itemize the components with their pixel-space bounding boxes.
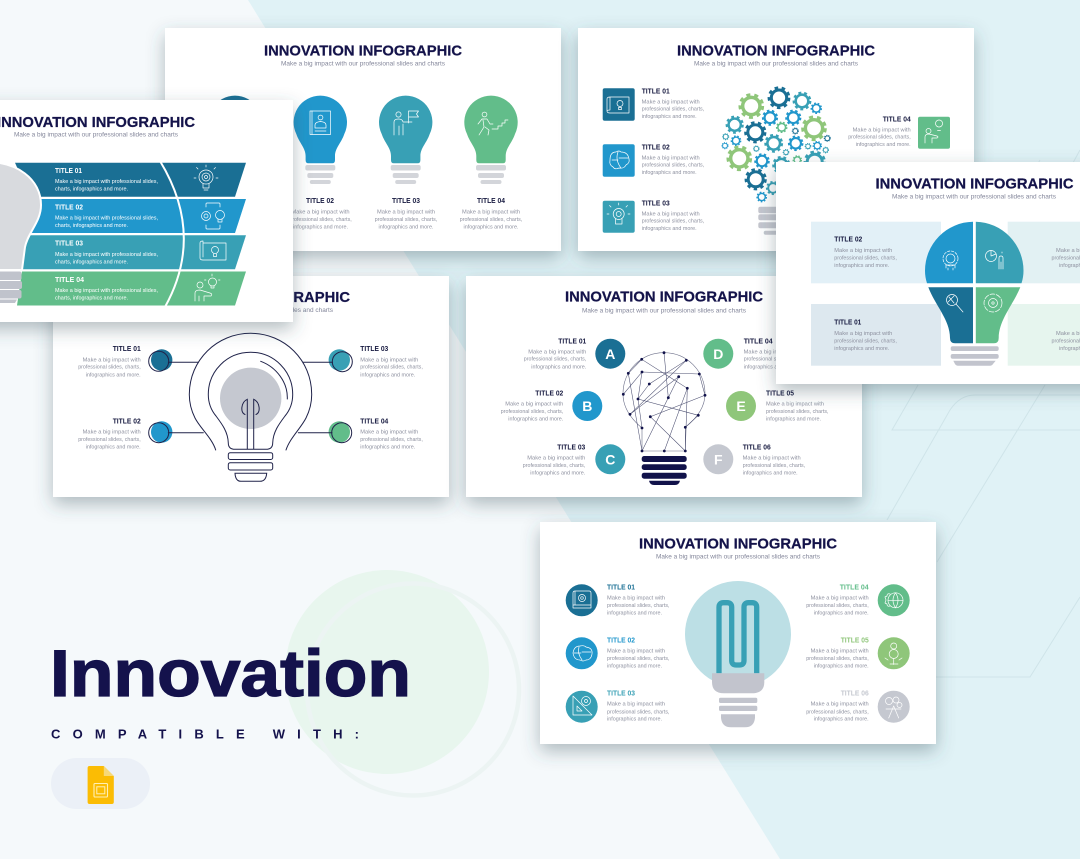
title 02 text: TITLE 02 bbox=[642, 142, 670, 151]
title 05 text: Make a big impact with bbox=[766, 402, 824, 408]
connector node 3 bbox=[303, 349, 352, 372]
title 04 text: professional slides, charts, bbox=[460, 217, 523, 223]
band 1 text: TITLE 01 bbox=[55, 166, 82, 175]
title 04 text: infographics and more. bbox=[744, 364, 799, 370]
title 02 text: infographics and more. bbox=[86, 444, 141, 450]
title 04 text: infographics and more. bbox=[814, 611, 869, 617]
title 04 text bbox=[806, 582, 869, 617]
subheading: compatible with: COMPATIBLE WITH: bbox=[51, 726, 359, 742]
connector node 1 bbox=[149, 349, 198, 371]
title 01 text: infographics and more. bbox=[86, 372, 141, 378]
title 01 text bbox=[524, 336, 587, 370]
icon: idea gear bbox=[194, 165, 218, 190]
title 02 text: Make a big impact with bbox=[607, 649, 665, 655]
slide subtitle: Make a big impact with our professional slides and charts bbox=[892, 193, 1056, 200]
title 06 text bbox=[743, 442, 806, 476]
band 2 text: charts, infographics and more. bbox=[55, 223, 128, 229]
icon: person and idea bbox=[195, 274, 220, 301]
slide title: INNOVATION INFOGRAPHIC bbox=[639, 535, 837, 552]
title 06 text: Make a big impact with bbox=[743, 456, 801, 462]
band 3 text bbox=[55, 238, 158, 265]
title 05 text: TITLE 05 bbox=[766, 388, 794, 397]
title 02 text: professional slides, charts, bbox=[78, 437, 141, 443]
icon: gears person circle bbox=[878, 637, 910, 669]
title 04 text bbox=[360, 416, 423, 450]
slide title: INNOVATION INFOGRAPHIC bbox=[152, 289, 350, 306]
slide title: INNOVATION INFOGRAPHIC bbox=[876, 175, 1074, 192]
icon tile 2 bbox=[603, 144, 635, 177]
bands bbox=[15, 163, 246, 306]
icon: Google Slides badge bbox=[51, 758, 150, 809]
title 05 text: Make a big impact with bbox=[811, 649, 869, 655]
badge D bbox=[703, 339, 733, 369]
title 03 text: Make a big impact with bbox=[377, 210, 435, 216]
slide title: INNOVATION INFOGRAPHIC bbox=[565, 289, 763, 306]
text panel bottom left: professional slides, charts, bbox=[834, 338, 897, 344]
title 04 text: TITLE 04 bbox=[360, 416, 388, 425]
title 03 text: professional slides, charts, bbox=[523, 463, 586, 469]
title 03 text: professional slides, charts, bbox=[642, 219, 705, 225]
title 01 text: Make a big impact with bbox=[607, 596, 665, 602]
title 01 text: professional slides, charts, bbox=[607, 603, 670, 609]
title 03 text: infographics and more. bbox=[642, 226, 697, 232]
title 01 text: Make a big impact with bbox=[528, 349, 586, 355]
fluorescent bulb bbox=[685, 581, 791, 727]
title 02 text: Make a big impact with bbox=[292, 210, 350, 216]
title 05 text: infographics and more. bbox=[814, 663, 869, 669]
title 04 text: Make a big impact with bbox=[360, 430, 418, 436]
band 4 text: TITLE 04 bbox=[55, 275, 84, 284]
title 01 text: professional slides, charts, bbox=[524, 357, 587, 363]
title 05 text: infographics and more. bbox=[766, 416, 821, 422]
white arc bbox=[160, 161, 184, 307]
title 03 text: Make a big impact with bbox=[360, 357, 418, 363]
title 02 text: TITLE 02 bbox=[607, 636, 635, 645]
band 2 text: TITLE 02 bbox=[55, 202, 83, 211]
title 05 text: TITLE 05 bbox=[841, 636, 869, 645]
slide title: INNOVATION INFOGRAPHIC bbox=[0, 114, 195, 131]
title 03 text: infographics and more. bbox=[378, 224, 434, 230]
title 02 text: professional slides, charts, bbox=[642, 163, 705, 169]
badge E: E bbox=[736, 398, 746, 414]
title 04 text: TITLE 04 bbox=[840, 582, 869, 591]
text panel top left: TITLE 02 bbox=[834, 235, 862, 244]
title 03 text: TITLE 03 bbox=[607, 689, 635, 698]
badge D: D bbox=[713, 346, 723, 362]
band 1 text: Make a big impact with professional slides, bbox=[55, 179, 158, 185]
text panel bottom left: TITLE 01 bbox=[834, 317, 861, 326]
title 06 text: professional slides, charts, bbox=[806, 709, 869, 715]
title 03 text: professional slides, charts, bbox=[375, 217, 438, 223]
badge A: A bbox=[605, 346, 615, 362]
grey bulb silhouette bbox=[0, 162, 41, 303]
heading: Innovation: Innovation bbox=[50, 636, 411, 710]
title 03 text: TITLE 03 bbox=[642, 198, 670, 207]
panel: slide with network bulb bbox=[466, 276, 862, 497]
title 01 text: TITLE 01 bbox=[607, 582, 635, 591]
text panel bottom left: Make a big impact with bbox=[834, 331, 892, 337]
title 04 text: professional slides, charts, bbox=[848, 135, 911, 141]
gear cluster bulb bbox=[722, 88, 830, 235]
title 01 text: TITLE 01 bbox=[558, 336, 586, 345]
text panel bottom left: infographics and more. bbox=[834, 346, 890, 352]
band 1 text: charts, infographics and more. bbox=[55, 186, 128, 192]
title 02 text bbox=[78, 416, 141, 450]
text panel top left: professional slides, charts, bbox=[834, 256, 897, 262]
title 03 text: infographics and more. bbox=[607, 717, 662, 723]
title 01 text: TITLE 01 bbox=[113, 344, 141, 353]
title 04 text: TITLE 04 bbox=[477, 196, 505, 205]
text panel top left bbox=[811, 222, 941, 283]
title 02 text: Make a big impact with bbox=[642, 155, 700, 161]
title 02 text: infographics and more. bbox=[607, 663, 662, 669]
title 01 text: infographics and more. bbox=[642, 114, 697, 120]
band 4 text: Make a big impact with professional slides, bbox=[55, 288, 158, 294]
title 03 text: professional slides, charts, bbox=[607, 709, 670, 715]
title 04 text: infographics and more. bbox=[856, 142, 911, 148]
slide subtitle: Make a big impact with our professional slides and charts bbox=[694, 60, 858, 68]
title 03 text bbox=[642, 198, 705, 232]
outline light bulb bbox=[189, 333, 312, 481]
title 04 text bbox=[848, 114, 911, 148]
title 04 text: Make a big impact with bbox=[811, 596, 869, 602]
title 02 text bbox=[289, 196, 352, 230]
connector node 4 bbox=[298, 421, 352, 443]
title 04 text: Make a big impact with bbox=[462, 210, 520, 216]
title 02 text: professional slides, charts, bbox=[607, 656, 670, 662]
panel: slide with banded bulb bbox=[0, 100, 293, 322]
title 04 text: TITLE 04 bbox=[883, 114, 911, 123]
title 05 text bbox=[766, 388, 829, 422]
badge F bbox=[703, 444, 733, 474]
title 02 text: Make a big impact with bbox=[83, 430, 141, 436]
band 1 text bbox=[55, 166, 158, 192]
icon: tools circle bbox=[566, 691, 598, 723]
title 06 text: professional slides, charts, bbox=[743, 463, 806, 469]
text panel bottom left bbox=[811, 304, 941, 366]
text panel bottom right bbox=[1008, 304, 1080, 366]
bulb 1 bbox=[208, 96, 262, 184]
text panel top left: infographics and more. bbox=[834, 263, 890, 269]
title 06 text: Make a big impact with bbox=[811, 702, 869, 708]
slide subtitle: Make a big impact with our professional slides and charts bbox=[582, 307, 746, 314]
title 02 text: infographics and more. bbox=[642, 170, 697, 176]
title 02 text bbox=[607, 636, 670, 669]
title 02 text bbox=[501, 388, 564, 422]
band 2 text bbox=[55, 202, 158, 229]
slide subtitle: Make a big impact with our professional slides and charts bbox=[656, 553, 820, 560]
badge F: F bbox=[714, 451, 723, 467]
title 06 text: TITLE 06 bbox=[743, 442, 771, 451]
panel: slide with fluorescent bulb bbox=[540, 522, 936, 744]
title 01 text: infographics and more. bbox=[531, 364, 587, 370]
panel: slide with quadrant bulb bbox=[776, 162, 1080, 384]
title 01 text: professional slides, charts, bbox=[78, 365, 141, 371]
badge B bbox=[572, 391, 602, 421]
band 2 text: Make a big impact with professional slides, bbox=[55, 216, 158, 222]
badge A bbox=[595, 339, 625, 369]
title 02 text: professional slides, charts, bbox=[289, 217, 352, 223]
title 03 text: professional slides, charts, bbox=[360, 365, 423, 371]
connector node 2 bbox=[149, 421, 203, 443]
title 01 text bbox=[642, 86, 705, 120]
slide subtitle: Make a big impact with our professional slides and charts bbox=[281, 61, 445, 68]
title 06 text: TITLE 06 bbox=[841, 689, 869, 698]
icon tile 1 bbox=[603, 88, 635, 121]
icon: gear to bulb cycle bbox=[202, 203, 224, 229]
icon tile 4 bbox=[918, 117, 950, 149]
title 03 text: infographics and more. bbox=[530, 470, 586, 476]
title 04 text: TITLE 04 bbox=[744, 336, 773, 345]
band 4 text: charts, infographics and more. bbox=[55, 295, 128, 301]
title 04 text bbox=[460, 196, 523, 230]
title 02 text bbox=[642, 142, 705, 176]
title 04 text bbox=[744, 336, 807, 370]
slide title: INNOVATION INFOGRAPHIC bbox=[677, 42, 875, 60]
title 04 text: professional slides, charts, bbox=[806, 603, 869, 609]
text panel top left: Make a big impact with bbox=[834, 248, 892, 254]
panel: slide with four bulbs bbox=[165, 28, 561, 251]
title 04 text: professional slides, charts, bbox=[744, 357, 807, 363]
title 06 text bbox=[806, 689, 869, 723]
title 05 text: professional slides, charts, bbox=[766, 409, 829, 415]
badge C bbox=[595, 444, 625, 474]
band 3 text: Make a big impact with professional slides, bbox=[55, 252, 158, 258]
icon: blueprint circle bbox=[566, 584, 598, 616]
title 01 text: Make a big impact with bbox=[83, 357, 141, 363]
quadrant bulb bbox=[925, 222, 1024, 366]
title 01 text: professional slides, charts, bbox=[642, 107, 705, 113]
title 02 text: TITLE 02 bbox=[113, 416, 141, 425]
title 01 text bbox=[607, 582, 670, 617]
band 3 text: charts, infographics and more. bbox=[55, 259, 128, 265]
title 02 text: TITLE 02 bbox=[306, 196, 334, 205]
title 01 text bbox=[78, 344, 141, 378]
title 03 text: infographics and more. bbox=[360, 372, 416, 378]
icon: brain circle bbox=[566, 637, 598, 669]
panel: slide with gear bulb bbox=[578, 28, 974, 251]
bulb 3 bbox=[379, 96, 432, 184]
title 04 text: Make a big impact with bbox=[853, 127, 911, 133]
title 03 text: TITLE 03 bbox=[392, 196, 420, 205]
title 01 text: TITLE 01 bbox=[642, 86, 670, 95]
slide title: INNOVATION INFOGRAPHIC bbox=[264, 43, 462, 60]
icon: blueprint bulb bbox=[200, 241, 226, 260]
icon: gears tripod circle bbox=[878, 691, 910, 723]
badge B: B bbox=[582, 398, 592, 414]
bulb 4 bbox=[464, 96, 518, 184]
bulb 2 bbox=[294, 96, 347, 184]
title 03 text bbox=[607, 689, 670, 723]
text panel top right bbox=[1008, 222, 1080, 283]
badge E bbox=[726, 391, 756, 421]
title 02 text: TITLE 02 bbox=[535, 388, 563, 397]
title 04 text: Make a big impact with bbox=[744, 349, 802, 355]
title 03 text bbox=[523, 442, 586, 476]
title 04 text: professional slides, charts, bbox=[360, 437, 423, 443]
title 05 text bbox=[806, 636, 869, 669]
title 02 text: Make a big impact with bbox=[505, 402, 563, 408]
icon tile 3 bbox=[603, 201, 635, 233]
title 01 text: Make a big impact with bbox=[642, 99, 700, 105]
panel: slide with outline bulb bbox=[53, 276, 449, 497]
slide subtitle: Make a big impact with our professional slides and charts bbox=[169, 307, 333, 314]
title 03 text bbox=[360, 344, 423, 378]
title 04 text: infographics and more. bbox=[360, 444, 416, 450]
title 01 text: infographics and more. bbox=[607, 611, 662, 617]
title 04 text: infographics and more. bbox=[464, 224, 519, 230]
band 3 text: TITLE 03 bbox=[55, 238, 83, 248]
slide subtitle: Make a big impact with our professional slides and charts bbox=[14, 132, 178, 139]
title 06 text: infographics and more. bbox=[814, 717, 869, 723]
title 02 text: infographics and more. bbox=[508, 416, 564, 422]
title 03 text: Make a big impact with bbox=[642, 211, 700, 217]
title 03 text: Make a big impact with bbox=[527, 456, 585, 462]
title 03 text: TITLE 03 bbox=[557, 442, 585, 451]
title 03 text bbox=[375, 196, 438, 230]
badge C: C bbox=[605, 451, 615, 467]
title 05 text: professional slides, charts, bbox=[806, 656, 869, 662]
title 06 text: infographics and more. bbox=[743, 470, 798, 476]
title 02 text: infographics and more. bbox=[293, 224, 348, 230]
title 03 text: TITLE 03 bbox=[360, 344, 388, 353]
icon: globe gear circle bbox=[878, 584, 910, 616]
band 4 text bbox=[55, 275, 158, 301]
title 03 text: Make a big impact with bbox=[607, 702, 665, 708]
network bulb bbox=[622, 351, 706, 485]
title 02 text: professional slides, charts, bbox=[501, 409, 564, 415]
